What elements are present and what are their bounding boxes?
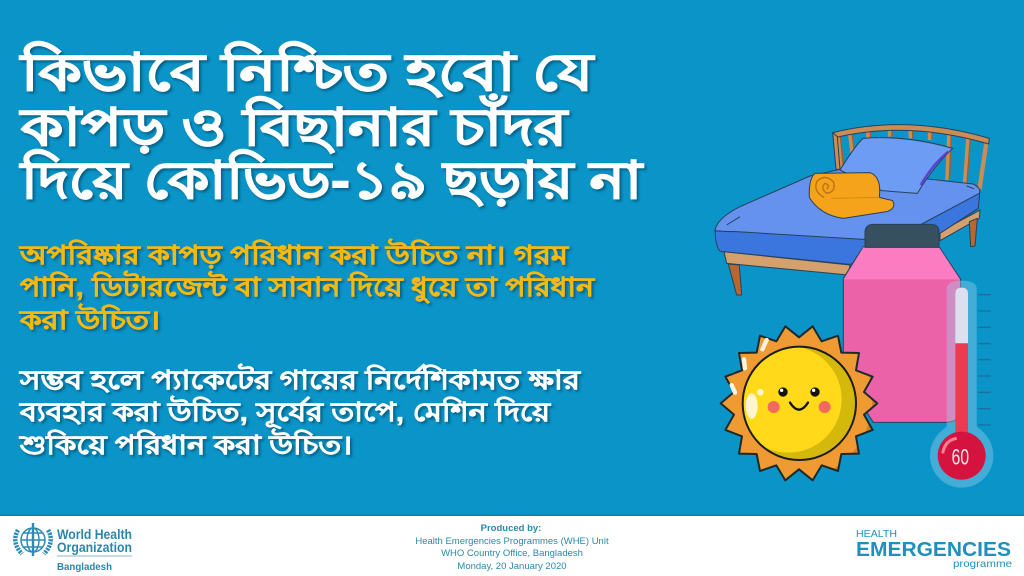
white text block: শুকিয়ে পরিধান করা উচিত। <box>19 428 352 460</box>
icon: pink bottle <box>843 224 961 422</box>
title: কিভাবে নিশ্চিত হবো যে <box>19 41 595 102</box>
white text block: সম্ভব হলে প্যাকেটের গায়ের নির্দেশিকামত ক্ষার <box>19 363 582 395</box>
footer panel <box>0 516 1024 576</box>
WHO wordmark: World Health <box>57 527 132 542</box>
production credits: WHO Country Office, Bangladesh <box>441 548 583 559</box>
title: দিয়ে কোভিড-১৯ ছড়ায় না <box>19 149 644 210</box>
Health Emergencies programme logo: HEALTH <box>856 528 897 540</box>
icon: bed <box>715 125 989 295</box>
Health Emergencies programme logo: programme <box>953 558 1012 570</box>
white text block <box>19 363 582 460</box>
yellow text block: পানি, ডিটারজেন্ট বা সাবান দিয়ে ধুয়ে তা পরিধান <box>20 270 596 304</box>
icon: thermometer <box>930 281 993 488</box>
yellow text block <box>19 238 596 335</box>
yellow text block: করা উচিত। <box>19 303 160 335</box>
icon: WHO emblem <box>15 523 51 556</box>
thermometer value: 60 <box>952 444 969 469</box>
production credits: Monday, 20 January 2020 <box>457 561 567 572</box>
WHO logo: Organization <box>57 540 132 555</box>
title <box>19 41 644 210</box>
icon: smiling sun <box>721 326 877 480</box>
WHO logo <box>15 523 132 573</box>
country label: Bangladesh <box>57 561 112 573</box>
Health Emergencies programme logo: EMERGENCIES <box>856 539 1011 561</box>
Health Emergencies programme logo <box>856 528 1012 570</box>
production credits: Health Emergencies Programmes (WHE) Unit <box>415 536 609 547</box>
title: কাপড় ও বিছানার চাঁদর <box>19 94 570 157</box>
white text block: ব্যবহার করা উচিত, সূর্যের তাপে, মেশিন দিয়ে <box>19 395 552 429</box>
production credits <box>415 523 609 572</box>
yellow text block: অপরিষ্কার কাপড় পরিধান করা উচিত না। গরম <box>19 238 570 270</box>
production credits: Produced by: <box>481 523 541 534</box>
